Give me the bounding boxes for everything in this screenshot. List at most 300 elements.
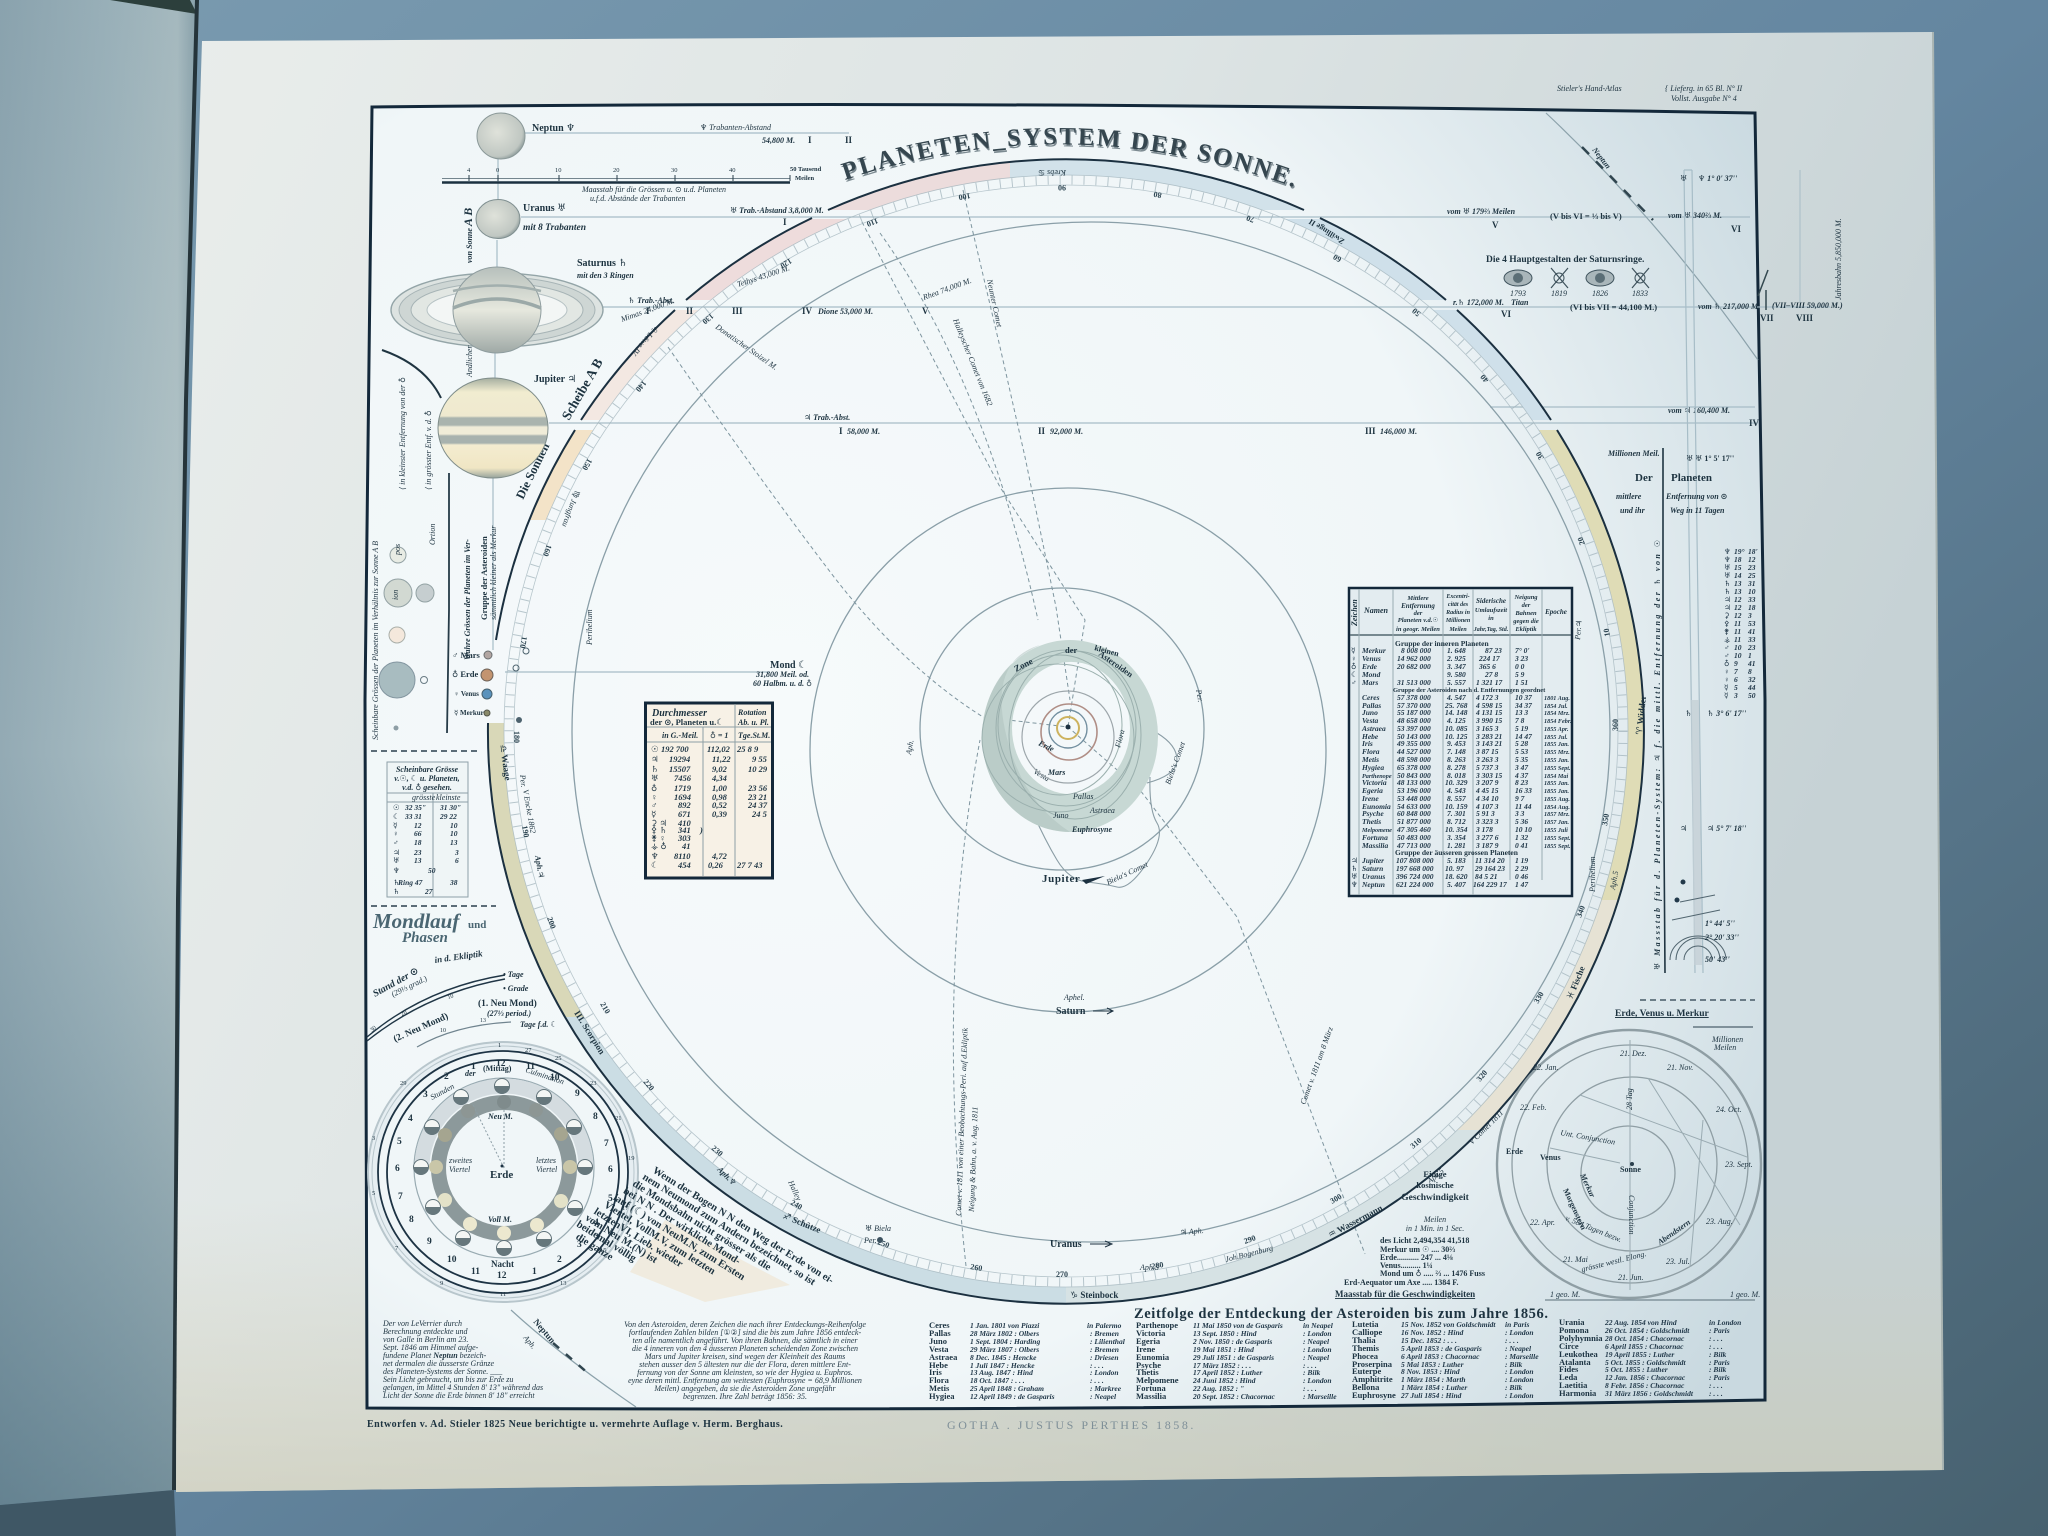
right margin table: degrees: ☿ xyxy=(1724,691,1729,700)
cosmic speeds block: Erd-Aequator um Axe ..... 1384 F. xyxy=(1344,1278,1458,1287)
asteroid list column 1: 1 Jan. 1801 von Piazzi xyxy=(970,1321,1040,1330)
table: planet elements: cität des xyxy=(1448,602,1469,608)
diagram: Erde, Venus, Merkur: Venus xyxy=(1540,1153,1561,1162)
degree numbers around the circle: 160 xyxy=(541,543,554,558)
note on Neptun xyxy=(382,1319,543,1400)
planet: Neptun: ♆ Trabanten-Abstand xyxy=(700,123,772,132)
apparent sizes column xyxy=(371,377,437,740)
asteroid list column 1: Ceres xyxy=(929,1320,950,1330)
table: planet elements: Mars xyxy=(1361,678,1378,687)
hour numerals: 2 xyxy=(557,1255,562,1265)
outer day numerals: 7 xyxy=(395,1245,399,1252)
cosmic speeds block: des Licht 2,494,354 41,518 xyxy=(1380,1236,1469,1245)
table: planet elements: 3 47 xyxy=(1514,763,1528,772)
comet markers along the band: Halley xyxy=(786,1178,804,1203)
table: Durchmesser der Planeten: 27 7 43 xyxy=(736,860,763,870)
right margin table: degrees: 11 xyxy=(1734,635,1741,644)
lunar phases diagram: Viertel xyxy=(449,1165,471,1174)
degree numbers around the circle: 100 xyxy=(958,191,971,202)
table: planet elements: 50 483 000 xyxy=(1397,833,1431,842)
asteroid list column 2: Parthenope xyxy=(1136,1320,1178,1330)
asteroid list column 2: : London xyxy=(1303,1345,1332,1354)
lunar phases diagram: Stunden xyxy=(429,1082,456,1102)
hour numerals: 12 xyxy=(497,1271,507,1281)
cosmic speeds block: in 1 Min. in 1 Sec. xyxy=(1406,1224,1464,1233)
comet markers along the band: Aph.♆ xyxy=(715,1164,738,1188)
comet markers along the band: ♃ Aph. xyxy=(1179,1226,1204,1237)
sun and moon arcs above lunar diagram: 10 xyxy=(440,1028,446,1034)
chart: planet distance and 11-day path: und ihr xyxy=(1620,506,1646,515)
asteroid zone: Mars xyxy=(1047,768,1065,777)
table: planet elements: 2 29 xyxy=(1514,864,1528,873)
comet path annotations xyxy=(713,278,1335,1216)
outer day numerals: 5 xyxy=(372,1190,375,1197)
table: planet elements: 1854 Jul. xyxy=(1544,703,1568,710)
table: planet elements: 4 131 15 xyxy=(1475,708,1502,717)
diameter scale bar: 4 xyxy=(467,167,471,174)
asteroid list column 2: 11 Mai 1850 von de Gasparis xyxy=(1193,1321,1283,1330)
table: Durchmesser der Planeten: ♄ xyxy=(651,764,659,774)
asteroid list column 4 xyxy=(1559,1317,1741,1398)
right margin table: degrees: 32 xyxy=(1747,675,1756,684)
diameter scale bar: Meilen xyxy=(795,175,815,182)
planet: Uranus: ♅ Trab.-Abstand 3,8,000 M. xyxy=(730,206,824,215)
outer day numerals: 1 xyxy=(498,1042,501,1049)
asteroid list column 1: Flora xyxy=(929,1375,950,1385)
right margin table: degrees: 41 xyxy=(1747,627,1756,636)
asteroid list column 4: Laetitia xyxy=(1559,1380,1588,1390)
table: planet elements: Erde xyxy=(1361,662,1378,671)
asteroid list column 3: 5 Mai 1853 : Luther xyxy=(1401,1360,1464,1369)
hour numerals: 3 xyxy=(423,1090,428,1100)
table: planet elements: ♆ xyxy=(1351,880,1358,889)
comet path annotations: Halleyscher Comet von 1682 xyxy=(951,316,994,407)
table: planet elements: 3 323 3 xyxy=(1475,817,1499,826)
table: Durchmesser der Planeten: 192 700 xyxy=(661,744,689,754)
table: planet elements: 50 143 000 xyxy=(1397,732,1431,741)
note on asteroids: Meilen) angegeben, da sie die Asteroiden Zone ungefähr xyxy=(653,1384,837,1393)
table: planet elements: Jahr,Tag, Std. xyxy=(1473,627,1509,633)
asteroid list column 4: : . . . xyxy=(1709,1342,1723,1351)
right margin table: degrees: 8 xyxy=(1748,667,1752,676)
Saturn ring phases: 1833 xyxy=(1632,289,1648,298)
table: planet elements: Umlaufszeit xyxy=(1475,607,1507,614)
page gutter line xyxy=(174,0,197,1490)
asteroid list column 2: 24 Juni 1852 : Hind xyxy=(1192,1376,1256,1385)
asteroid list column 3: 15 Nov. 1852 von Goldschmidt xyxy=(1401,1320,1496,1329)
asteroid list column 3: Phocea xyxy=(1352,1351,1379,1361)
sun and moon arcs above lunar diagram: in d. Ekliptik xyxy=(434,948,484,965)
dashed separators in left column xyxy=(371,751,496,906)
right margin table: degrees: ♄ xyxy=(1724,579,1731,588)
moons on outer ring xyxy=(414,1078,592,1256)
table: Durchmesser der Planeten: Ab. u. Pl. xyxy=(737,718,769,727)
asteroid list column 4: : . . . xyxy=(1709,1334,1723,1343)
right margin table: degrees: ♅ xyxy=(1724,563,1731,572)
table: planet elements: 20 682 000 xyxy=(1396,662,1431,671)
right margin table: degrees: ♅ xyxy=(1724,571,1731,580)
table: planet elements: 0 0 xyxy=(1515,662,1525,671)
table: planet elements: 621 224 000 xyxy=(1396,880,1434,889)
table: planet elements: 1855 Sept. xyxy=(1544,835,1571,842)
table: planet elements: 396 724 000 xyxy=(1395,872,1434,881)
asteroid list column 2: : . . . xyxy=(1303,1384,1317,1393)
lunar phases diagram: Viertel xyxy=(536,1165,558,1174)
table: planet elements: Irene xyxy=(1361,794,1379,803)
table: planet elements: 11 44 xyxy=(1515,802,1532,811)
table: planet elements: 1 321 17 xyxy=(1476,678,1502,687)
planet: Saturnus with rings: mit den 3 Ringen xyxy=(577,271,634,280)
asteroid zone: Vesta xyxy=(1032,767,1051,783)
right margin table: degrees: 44 xyxy=(1747,683,1756,692)
asteroid list column 4: : Paris xyxy=(1709,1358,1730,1367)
table: planet elements: Astraea xyxy=(1361,724,1386,733)
table: Durchmesser der Planeten: ⚵ ♀ xyxy=(651,833,666,843)
table: Durchmesser der Planeten: 1719 xyxy=(674,783,692,793)
table: planet elements: 5 9 xyxy=(1515,670,1525,679)
right margin table: degrees: 25 xyxy=(1747,571,1756,580)
table: apparent size: ♂ xyxy=(393,838,399,847)
right margin table: degrees: 7 xyxy=(1734,667,1738,676)
diagram: Erde, Venus, Merkur: Abendstern xyxy=(1655,1217,1693,1247)
hour numerals: 1 xyxy=(471,1062,476,1072)
outer day numerals: 11 xyxy=(500,1291,506,1298)
table: planet elements: Entfernung xyxy=(1400,602,1435,610)
table: apparent size: v.☉, ☾ u. Planeten, xyxy=(394,774,460,783)
right margin table: degrees: 23 xyxy=(1747,563,1756,572)
sun limb arc and vertical titles xyxy=(382,208,475,733)
degree numbers around the circle: 300 xyxy=(1328,1192,1343,1206)
outer day numerals: 3 xyxy=(372,1135,375,1142)
table: planet elements: 1855 Sept. xyxy=(1544,843,1571,850)
right margin table: degrees: ♁ xyxy=(1724,659,1730,668)
asteroid list column 2: in Neapel xyxy=(1303,1321,1334,1330)
asteroid list column 4: 26 Oct. 1854 : Goldschmidt xyxy=(1604,1326,1690,1335)
table: Durchmesser der Planeten: 0,98 xyxy=(712,792,728,802)
planet: Jupiter: ♃ Trab.-Abst. xyxy=(804,413,850,422)
cosmic speeds block: Venus.......... 1¼ xyxy=(1380,1261,1433,1270)
top-right atlas reference: Vollst. Ausgabe N° 4 xyxy=(1671,94,1737,103)
inner planets fan: 1° 44' 5'' xyxy=(1705,919,1736,928)
table: apparent size: 23 xyxy=(413,848,422,857)
right margin table: degrees: 10 xyxy=(1734,651,1742,660)
sun and moon arcs above lunar diagram: (29⅓ grad.) xyxy=(390,974,429,999)
planet: Uranus: Uranus ♅ xyxy=(523,203,566,214)
asteroid list column 2: Eunomia xyxy=(1136,1352,1170,1362)
zodiac sign labels xyxy=(498,168,1648,1300)
right margin table: degrees: 3 xyxy=(1747,611,1752,620)
asteroid list column 4: Circe xyxy=(1559,1341,1579,1351)
degree numbers around the circle: 10 xyxy=(1602,628,1612,637)
table: planet elements: Ceres xyxy=(1362,693,1380,702)
diagram: Erde, Venus, Merkur: Erde xyxy=(1506,1147,1523,1156)
table: planet elements: 8. 712 xyxy=(1447,817,1466,826)
lunar phases diagram xyxy=(368,1042,638,1302)
explanatory note on Neumond arc: Viertel, VollM.V, zum letzten xyxy=(602,1200,717,1277)
asteroid list column 2: Melpomene xyxy=(1136,1375,1179,1385)
table: planet elements: 4. 543 xyxy=(1446,786,1466,795)
chart: planet distance and 11-day path: ♅ xyxy=(1680,174,1687,183)
table: planet elements: 8. 018 xyxy=(1447,771,1466,780)
asteroid list column 4: : Paris xyxy=(1709,1373,1730,1382)
asteroid zone: kleinen xyxy=(1093,643,1120,659)
table: planet elements: Ekliptik xyxy=(1514,626,1537,633)
degree numbers around the circle: 270 xyxy=(1056,1270,1068,1279)
lunar phases diagram: der xyxy=(465,1069,477,1078)
explanatory note on Neumond arc: lauf (☾) von NeuM.N, zum Ersten xyxy=(611,1192,747,1283)
right margin table: degrees: 10 xyxy=(1734,643,1742,652)
credit line: Entworfen v. Ad. Stieler 1825 Neue berichtigte u. vermehrte Auflage v. Herm. Berghaus. xyxy=(367,1419,783,1430)
true sizes of inner planets: Wahre Grössen der Planeten im Ver- xyxy=(463,539,472,660)
table: planet elements: 3 3 xyxy=(1514,809,1525,818)
note on Neptun: von Galle in Berlin am 23. xyxy=(383,1335,468,1344)
true sizes of inner planets: ☿ Merkur xyxy=(454,709,484,717)
right margin table: degrees: 41 xyxy=(1747,659,1756,668)
asteroid list column 1: Juno xyxy=(929,1336,947,1346)
asteroid list column 4: Polyhymnia xyxy=(1559,1333,1603,1343)
note on asteroids: die 4 inneren von den 4 äusseren Planeten scheidenden Zone zwischen xyxy=(632,1344,858,1353)
explanatory note on Neumond arc: bei N N . Der wirkliche Mond- xyxy=(621,1186,743,1267)
planet: Uranus xyxy=(476,200,824,238)
page right edge xyxy=(1933,32,1943,1470)
zodiac band: degree tick ring xyxy=(504,175,1628,1287)
asteroid list column 2: Victoria xyxy=(1136,1328,1166,1338)
hour numerals: 11 xyxy=(471,1267,480,1277)
asteroid list column 1 xyxy=(929,1320,1126,1401)
asteroid list column 1: : Markree xyxy=(1090,1384,1122,1393)
degree numbers around the circle: 180 xyxy=(512,731,521,743)
right margin table: degrees: ⚶ xyxy=(1724,635,1730,644)
label: Mond distance: Mond ☾ xyxy=(770,660,807,671)
table: planet elements: 87 23 xyxy=(1485,646,1502,655)
diagram: Erde, Venus, Merkur: Erde, Venus u. Merkur xyxy=(1615,1009,1709,1019)
table: planet elements: 1854 Mrz. xyxy=(1544,710,1570,717)
chart: planet distance and 11-day path: ♄ xyxy=(1685,709,1692,718)
table: apparent size: ☿ xyxy=(393,821,398,830)
table: planet elements: 25. 768 xyxy=(1444,701,1468,710)
table: planet elements: Juno xyxy=(1361,708,1378,717)
asteroid zone: Pallas xyxy=(1072,792,1093,801)
right margin table: degrees: 5 xyxy=(1734,683,1738,692)
hour numerals: 9 xyxy=(575,1089,580,1099)
Jupiter, Saturn and Uranus orbit labels: Aphel. xyxy=(1063,993,1085,1002)
planet: Saturnus with rings: II xyxy=(686,306,694,316)
table: Durchmesser der Planeten: 23 56 xyxy=(747,783,768,793)
table: planet elements: Hygiea xyxy=(1361,763,1384,772)
table: apparent size: 31 30" xyxy=(439,803,461,812)
table: planet elements: 3. 354 xyxy=(1446,833,1466,842)
outer orbit: Neptun: Aph. xyxy=(521,1333,538,1351)
degree numbers around the circle xyxy=(512,183,1620,1279)
table: planet elements: Iris xyxy=(1361,739,1373,748)
table: planet elements: Egeria xyxy=(1361,786,1383,795)
table: planet elements: 10. 97 xyxy=(1445,864,1464,873)
table: planet elements: 60 848 000 xyxy=(1397,809,1431,818)
table: planet elements: 9. 453 xyxy=(1447,739,1466,748)
hour numerals: 9 xyxy=(427,1237,432,1247)
comet markers along the band: V Comet 1811 xyxy=(1467,1108,1505,1146)
table: planet elements: 3 178 xyxy=(1475,825,1493,834)
note on asteroids: Von den Asteroiden, deren Zeichen die nach ihrer Entdeckungs-Reihenfolge xyxy=(624,1320,866,1329)
right margin distances: VI xyxy=(1501,309,1511,319)
zodiac sign labels: Krebs ♋ xyxy=(1038,168,1067,177)
asteroid list column 3 xyxy=(1352,1319,1539,1400)
asteroid list column 3: 6 April 1853 : Chacornac xyxy=(1401,1352,1480,1361)
planet: Saturnus with rings: III xyxy=(732,306,743,316)
table: planet elements: Parthenope xyxy=(1362,773,1392,780)
comet markers along the band: Aph.5 xyxy=(1139,1263,1159,1272)
apparent sizes column: pos xyxy=(393,544,402,556)
table: planet elements: Meilen xyxy=(1448,627,1467,633)
asteroid list column 4: Atalanta xyxy=(1559,1357,1591,1367)
table: Durchmesser der Planeten: 24 37 xyxy=(747,800,768,810)
table: Durchmesser der Planeten: ⚳ ♃ xyxy=(651,818,667,828)
table: Durchmesser der Planeten: ♁ = 1 xyxy=(710,731,728,740)
table: planet elements: 5. 407 xyxy=(1447,880,1466,889)
right margin table: degrees: ⚴ xyxy=(1724,619,1730,628)
diameter scale bar: 30 xyxy=(671,167,678,174)
asteroid list column 1: 25 April 1848 : Graham xyxy=(969,1384,1044,1393)
table: planet elements: 1854 Mai xyxy=(1544,773,1569,780)
table: planet elements: 197 668 000 xyxy=(1396,864,1434,873)
planet: Mars xyxy=(484,651,492,659)
chart: planet distance and 11-day path xyxy=(1607,170,1747,973)
table: planet elements: 3 303 15 xyxy=(1475,771,1502,780)
asteroid list column 2: : Neapel xyxy=(1303,1337,1330,1346)
sun limb arc and vertical titles: von Sonne A B xyxy=(461,208,475,263)
comet path annotations: Donatischer Stoizel M. xyxy=(713,322,779,372)
table: planet elements: 10. 159 xyxy=(1445,802,1468,811)
table: apparent size: ♄ xyxy=(393,887,400,896)
degree numbers around the circle: 220 xyxy=(641,1078,656,1092)
note on asteroids: Mars und Jupiter kreisen, sind wegen der Kleinheit des Raums xyxy=(644,1352,845,1361)
sun and moon arcs above lunar diagram: 30 xyxy=(369,1025,378,1034)
table: planet elements: 3 165 3 xyxy=(1475,724,1499,733)
planet: Saturnus with rings: Saturnus ♄ xyxy=(577,258,627,269)
true sizes of inner planets xyxy=(452,525,498,717)
right margin distances: VIII xyxy=(1796,313,1814,323)
note on Neptun: Berechnung entdeckte und xyxy=(383,1327,469,1336)
bottom left binding shadow xyxy=(0,1490,176,1536)
heading: Mondlauf und Phasen: Mondlauf xyxy=(372,909,461,933)
table: planet elements: 1855 Sept. xyxy=(1544,765,1571,772)
table: planet elements: 4. 125 xyxy=(1446,716,1466,725)
right margin table: degrees: 11 xyxy=(1734,627,1741,636)
asteroid list column 3: Themis xyxy=(1352,1343,1380,1353)
asteroid list column 2: Egeria xyxy=(1136,1336,1161,1346)
planet: Neptun xyxy=(477,113,853,159)
table: planet elements: 1855 Aug. xyxy=(1544,796,1570,803)
planet: Saturnus with rings: IV xyxy=(802,306,813,316)
note on Neptun: net dermalen die äusserste Gränze xyxy=(383,1359,495,1368)
asteroid list column 3: in Paris xyxy=(1505,1320,1529,1329)
degree numbers around the circle: 350 xyxy=(1600,813,1611,826)
table: planet elements: 3 990 15 xyxy=(1475,716,1502,725)
asteroid zone: Juno xyxy=(1053,811,1069,820)
asteroid list column 3: Thalia xyxy=(1352,1335,1376,1345)
sun disc label: Die Sonnen xyxy=(513,441,552,501)
diagram: Erde, Venus, Merkur: Merkur xyxy=(1578,1171,1597,1200)
comet path annotations: Neunter Comet xyxy=(985,278,1004,329)
table: planet elements: Zeichen xyxy=(1350,599,1359,627)
table: apparent size: ☉ xyxy=(393,803,400,812)
asteroid list column 2: 2 Nov. 1850 : de Gasparis xyxy=(1192,1337,1272,1346)
table: planet elements: 7. 301 xyxy=(1447,809,1466,818)
right margin table: degrees: 18' xyxy=(1748,547,1758,556)
right margin distances: VI xyxy=(1731,224,1741,234)
right margin table: degrees: ♆ xyxy=(1724,555,1731,564)
table: planet elements: 3 87 15 xyxy=(1475,747,1499,756)
hour numerals: 4 xyxy=(408,1114,413,1124)
table: planet elements: 1855 Apr. xyxy=(1544,726,1569,733)
degree numbers around the circle: 40 xyxy=(1478,373,1491,384)
table: Durchmesser der Planeten xyxy=(646,703,772,878)
degree numbers around the circle: 240 xyxy=(789,1198,804,1212)
asteroid zone label: Zone xyxy=(1012,656,1034,674)
table: planet elements: 8. 278 xyxy=(1447,763,1466,772)
asteroid list column 1: Iris xyxy=(929,1367,942,1377)
table: planet elements: 5. 183 xyxy=(1447,856,1466,865)
hour numerals: 8 xyxy=(409,1215,414,1225)
table: Durchmesser der Planeten: in G.-Meil. xyxy=(662,731,698,740)
table: Durchmesser der Planeten: 19294 xyxy=(669,754,690,764)
right margin distances: Titan xyxy=(1511,298,1529,307)
table: apparent size: Scheinbare Grösse xyxy=(396,765,458,774)
table: Durchmesser der Planeten: ♀ xyxy=(651,792,657,802)
note on asteroids xyxy=(624,1320,866,1401)
table: planet elements: 1. 281 xyxy=(1447,841,1466,850)
sun and moon arcs above lunar diagram: (1. Neu Mond) xyxy=(478,998,537,1009)
degree numbers around the circle: 150 xyxy=(580,457,594,472)
note on asteroids: eyne deren mittl. Entfernung am weitesten (Euphrosyne = 68,9 Millionen xyxy=(628,1376,862,1385)
hour numerals: 6 xyxy=(395,1164,400,1174)
table: Durchmesser der Planeten: Tge.St.M. xyxy=(738,731,770,740)
table: planet elements: der xyxy=(1414,610,1423,617)
Jupiter, Saturn and Uranus orbit labels: Perihelium xyxy=(1588,856,1597,893)
zodiac sign labels: Zwillinge II xyxy=(1307,217,1346,246)
right margin table: degrees: 13 xyxy=(1734,587,1742,596)
table: planet elements: 7° 0' xyxy=(1515,646,1529,655)
right margin table: degrees: ⚳ xyxy=(1724,611,1730,620)
zodiac sign labels: ♑ Steinbock xyxy=(1070,1290,1118,1300)
table: planet elements: ♃ xyxy=(1351,856,1358,865)
table: planet elements: 54 633 000 xyxy=(1397,802,1431,811)
asteroid list column 4: 8 Febr. 1856 : Chacornac xyxy=(1605,1381,1685,1390)
table: Durchmesser der Planeten: 23 21 xyxy=(747,792,767,802)
table: apparent size: ♆ xyxy=(393,866,400,875)
asteroid list column 2: Fortuna xyxy=(1136,1383,1166,1393)
asteroid zone: Astraea xyxy=(1089,806,1115,815)
table: planet elements: Metis xyxy=(1361,755,1379,764)
asteroid list column 4: : Bilk xyxy=(1709,1365,1727,1374)
planet: Jupiter xyxy=(438,374,1417,478)
note on Neptun: Der von LeVerrier durch xyxy=(382,1319,462,1328)
planet: Jupiter: III xyxy=(1365,426,1376,436)
comet markers along the band: Aph.♃ xyxy=(533,854,546,879)
table: planet elements: Psyche xyxy=(1362,809,1384,818)
comet markers along the band: Joh.Bogenburg xyxy=(1224,1243,1274,1264)
table: planet elements: 18. 620 xyxy=(1445,872,1468,881)
table: Durchmesser der Planeten: ♁ xyxy=(651,783,657,793)
planet: Neptun: Neptun ♆ xyxy=(532,123,575,134)
planet: Saturnus with rings: I xyxy=(646,306,650,316)
asteroid list column 4: 22 Aug. 1854 von Hind xyxy=(1604,1318,1677,1327)
explanatory note on Neumond arc xyxy=(568,1146,836,1369)
table: planet elements: gegen die xyxy=(1512,618,1539,625)
planet: Saturnus with rings: V xyxy=(922,306,929,316)
diameter scale bar: 20 xyxy=(613,167,620,174)
degree numbers around the circle: 110 xyxy=(865,216,879,229)
